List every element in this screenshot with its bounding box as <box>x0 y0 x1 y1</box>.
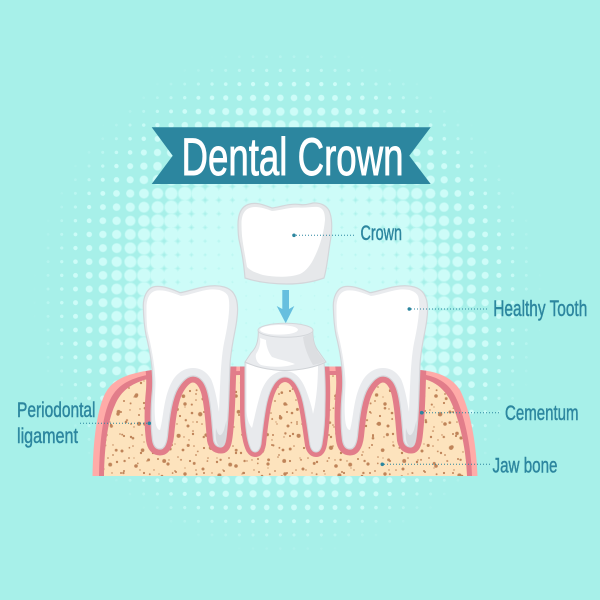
halftone dot burst <box>46 56 528 548</box>
abutment top <box>258 323 313 337</box>
abutment right shade <box>303 333 325 365</box>
floating crown <box>238 203 332 284</box>
root <box>245 362 325 452</box>
label: jaw bone: Jaw bone <box>492 454 558 478</box>
abutment cone <box>245 331 326 370</box>
label: periodontal ligament: Periodontal <box>17 399 96 422</box>
label: crown: Crown <box>360 222 402 245</box>
label: cementum <box>420 402 578 425</box>
right healthy tooth <box>333 286 428 449</box>
label: jaw bone <box>380 454 558 478</box>
abutment shine <box>256 338 295 367</box>
left healthy tooth <box>143 286 238 449</box>
label: periodontal ligament <box>17 399 151 448</box>
abutment top shine <box>260 325 298 335</box>
title text: Dental Crown <box>182 128 404 187</box>
jaw cross-section <box>92 366 478 476</box>
bone speckles <box>104 375 467 476</box>
inner gum band <box>99 371 472 476</box>
jaw bone <box>104 375 467 476</box>
title banner <box>152 127 431 187</box>
outer gum <box>92 366 478 476</box>
ribbon <box>152 127 431 184</box>
label: periodontal ligament: ligament <box>17 425 78 448</box>
root highlight <box>246 364 318 428</box>
arrow <box>277 290 294 323</box>
label: crown <box>292 222 402 245</box>
tooth sockets <box>144 366 426 457</box>
crown highlight <box>242 207 325 277</box>
prepared middle tooth <box>245 323 326 452</box>
label: healthy tooth <box>408 296 587 321</box>
